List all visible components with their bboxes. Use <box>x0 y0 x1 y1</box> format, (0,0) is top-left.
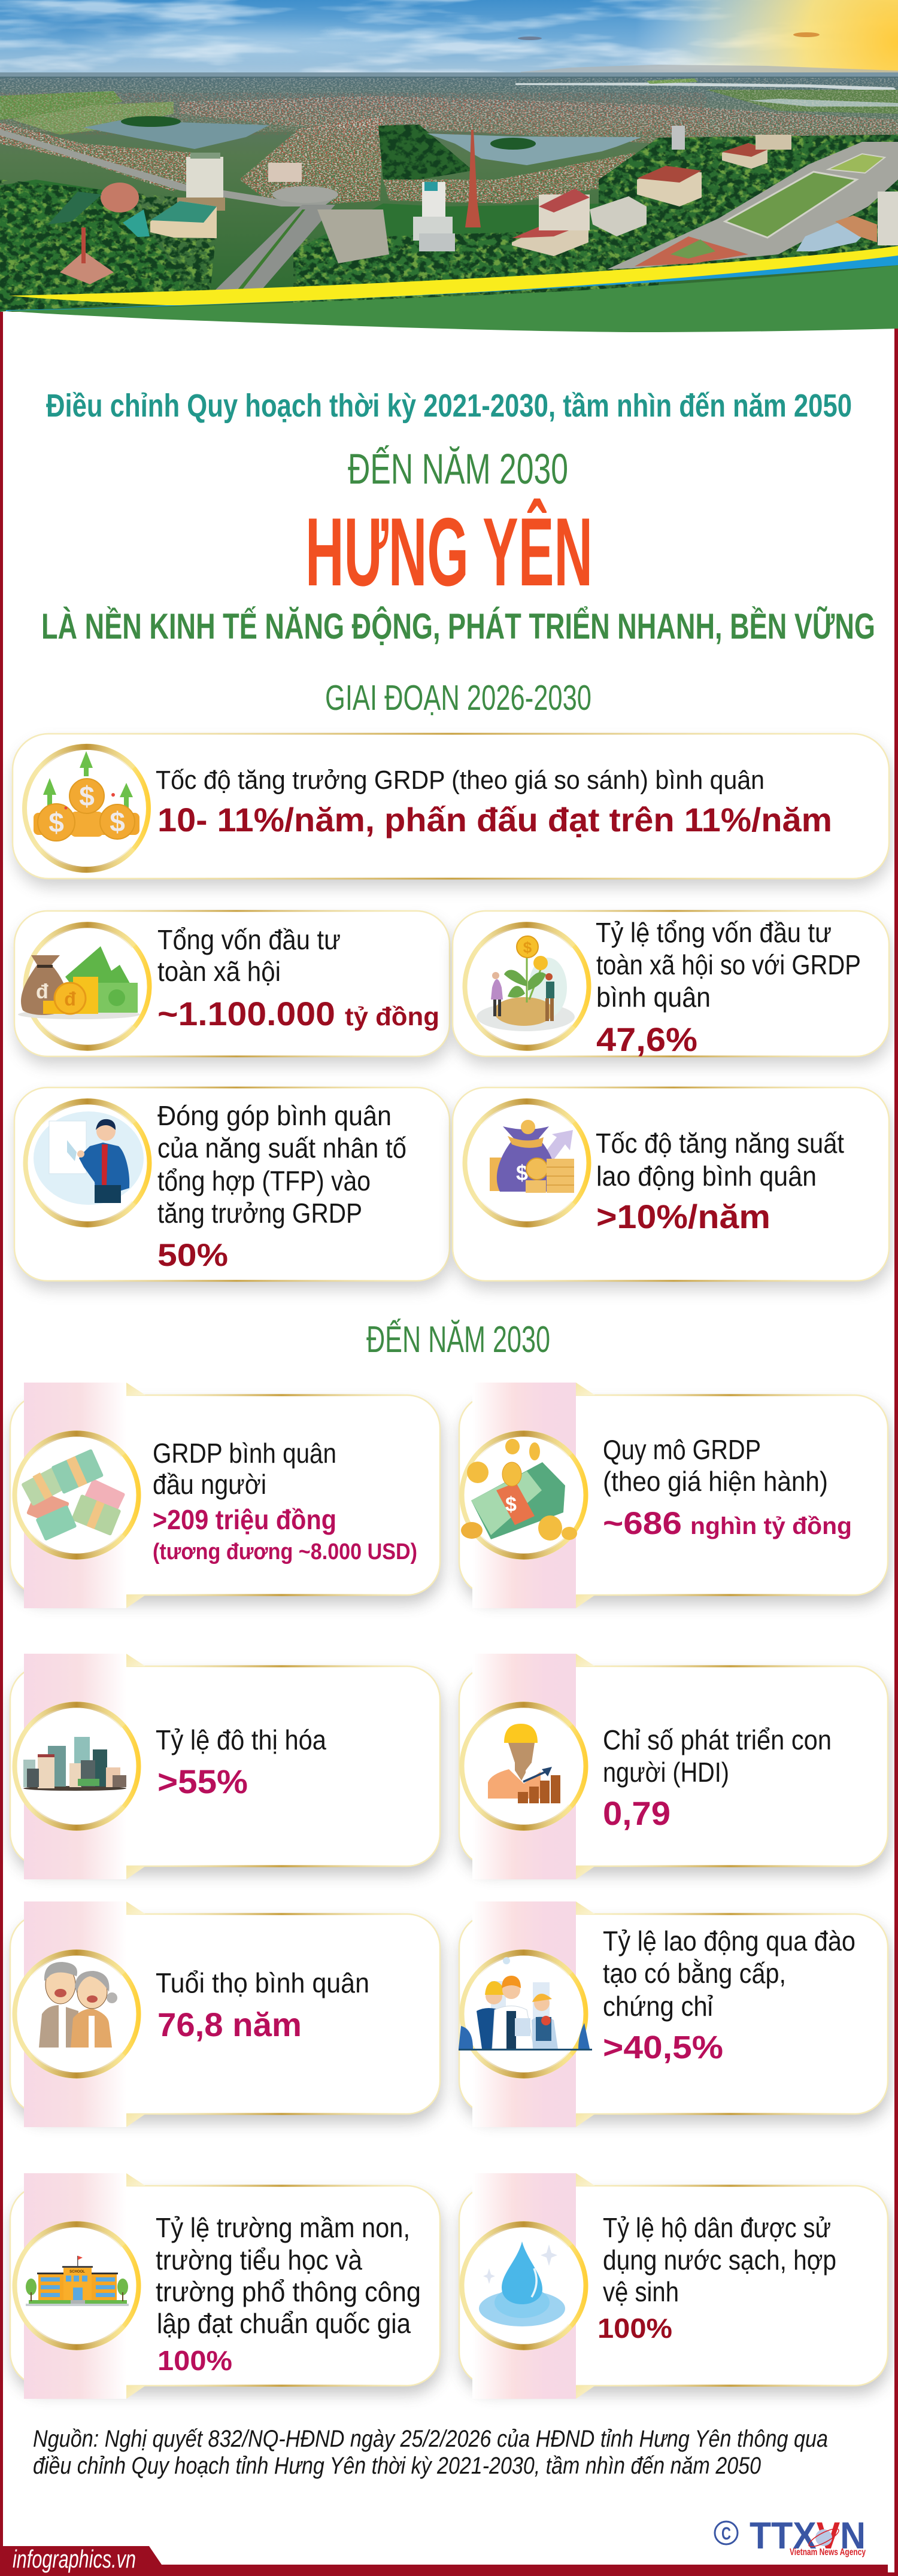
card: national-standard schools: trường phổ thông công <box>156 2276 421 2307</box>
text: life expectancy: Tuổi thọ bình quân <box>156 1967 369 1998</box>
card: trained labour share <box>459 1901 890 2127</box>
text: schools: Tỷ lệ trường mầm non, <box>156 2212 410 2243</box>
value: HDI: 0,79 <box>603 1794 671 1832</box>
icon: worker with rising bars <box>488 1724 560 1803</box>
text: total investment: Tổng vốn đầu tư <box>157 924 341 955</box>
card: national-standard schools <box>10 2173 442 2399</box>
source note <box>33 2426 828 2479</box>
value: GRDP scale: ~686 <box>603 1506 682 1541</box>
panel: investment to GRDP ratio <box>453 911 891 1065</box>
value: GRDP per capita: >209 triệu đồng <box>153 1504 336 1535</box>
panel: investment to GRDP ratio: bình quân <box>596 982 711 1013</box>
card: national-standard schools: trường tiểu học và <box>156 2244 362 2276</box>
panel: TFP contribution: tổng hợp (TFP) vào <box>157 1165 371 1196</box>
icon: water drop <box>479 2241 565 2326</box>
icon: rising gold coins: $ <box>79 780 95 812</box>
source note: điều chỉnh Quy hoạch tỉnh Hưng Yên thời kỳ 2021-2030, tầm nhìn đến năm 2050 <box>33 2453 761 2479</box>
card: human development index: người (HDI) <box>603 1757 729 1788</box>
icon: stacks of banknotes <box>21 1449 125 1541</box>
value: trained labour: >40,5% <box>603 2030 723 2065</box>
icon: rising gold coins <box>34 751 139 841</box>
footer bar with site name: infographics.vn <box>13 2545 136 2573</box>
section heading: by 2030: ĐẾN NĂM 2030 <box>366 1319 550 1360</box>
card: trained labour share: tạo có bằng cấp, <box>603 1958 786 1989</box>
card: clean water access: dụng nước sạch, hợp <box>603 2244 836 2276</box>
icon: three workers <box>459 1957 592 2051</box>
text: clean water: Tỷ lệ hộ dân được sử <box>603 2212 831 2243</box>
text: GRDP growth: Tốc độ tăng trưởng GRDP (theo giá so sánh) bình quân <box>156 765 764 795</box>
icon: purple money bag with arrow <box>490 1120 574 1193</box>
icon: money bag and banknotes: đ <box>36 980 48 1003</box>
text: TFP contribution: Đóng góp bình quân <box>157 1100 392 1131</box>
value: investment ratio: 47,6% <box>596 1020 697 1058</box>
icon: cash and coins: $ <box>505 1493 517 1516</box>
icon: elderly couple <box>39 1962 117 2048</box>
text: investment ratio: Tỷ lệ tổng vốn đầu tư <box>596 917 832 948</box>
panel: total social investment: toàn xã hội <box>157 956 281 987</box>
text: GRDP per capita: GRDP bình quân <box>153 1438 336 1469</box>
icon: plant growing coins: $ <box>523 938 532 956</box>
hero wave: yellow, blue and green ribbons <box>0 246 898 335</box>
card: GRDP per capita: đầu người <box>153 1469 266 1500</box>
logo: TTXVN Vietnam News Agency: Vietnam News Agency <box>790 2547 866 2557</box>
panel: TFP contribution: của năng suất nhân tố <box>157 1132 406 1164</box>
icon: money bag and banknotes: đ <box>64 988 76 1010</box>
footer bar with site name <box>0 2545 898 2576</box>
logo: TTXVN Vietnam News Agency: C <box>721 2524 731 2544</box>
panel: labour productivity growth: lao động bình quân <box>596 1161 817 1192</box>
value: life expectancy: 76,8 năm <box>157 2006 302 2043</box>
card: GRDP scale: nghìn tỷ đồng <box>690 1513 852 1539</box>
card: GRDP scale <box>459 1383 890 1608</box>
text: labour productivity: Tốc độ tăng năng suất <box>596 1128 844 1159</box>
text: HDI: Chỉ số phát triển con <box>603 1724 832 1755</box>
text: urbanisation: Tỷ lệ đô thị hóa <box>156 1724 326 1755</box>
tall buildings <box>186 157 223 199</box>
panel: total social investment: tỷ đồng <box>345 1003 439 1031</box>
icon: school building <box>26 2256 129 2306</box>
text: GRDP scale: Quy mô GRDP <box>603 1434 761 1465</box>
value: urbanisation: >55% <box>157 1763 248 1800</box>
icon: rising gold coins: $ <box>110 806 125 837</box>
value: GRDP growth: 10- 11%/năm, phấn đấu đạt trên 11%/năm <box>157 801 832 839</box>
section heading: 2026-2030: GIAI ĐOẠN 2026-2030 <box>325 678 591 718</box>
text: trained labour: Tỷ lệ lao động qua đào <box>603 1925 855 1957</box>
value: labour productivity: >10%/năm <box>596 1198 770 1235</box>
card: GRDP per capita: (tương đương ~8.000 USD) <box>153 1539 417 1565</box>
panel: TFP contribution <box>14 1087 451 1289</box>
hero photo: aerial view of Hung Yen city <box>0 0 898 312</box>
icon: plant growing coins <box>477 936 575 1031</box>
panel: GRDP growth rate <box>13 734 891 887</box>
panel: labour productivity growth <box>453 1087 891 1289</box>
card: life expectancy <box>10 1901 442 2127</box>
panel: investment to GRDP ratio: toàn xã hội so với GRDP <box>596 949 861 980</box>
icon: purple money bag with arrow: $ <box>516 1161 528 1185</box>
main title: HƯNG YÊN <box>305 498 593 606</box>
card: human development index <box>459 1654 890 1879</box>
panel: total social investment <box>14 911 451 1065</box>
icon: rising gold coins: $ <box>48 807 64 838</box>
logo: TTXVN Vietnam News Agency: TTXVN <box>750 2515 866 2557</box>
icon: businessman presenting <box>34 1111 144 1205</box>
icon: money bag and banknotes <box>18 946 140 1019</box>
card: trained labour share: chứng chỉ <box>603 1991 713 2022</box>
icon: cash and coins <box>461 1439 577 1541</box>
card: GRDP scale: (theo giá hiện hành) <box>603 1466 828 1497</box>
card: clean water access: vệ sinh <box>603 2276 679 2307</box>
value: TFP contribution: 50% <box>157 1238 228 1273</box>
icon: school building: SCHOOL <box>69 2270 85 2274</box>
heading: by 2030: ĐẾN NĂM 2030 <box>348 446 568 493</box>
panel: TFP contribution: tăng trưởng GRDP <box>157 1198 362 1229</box>
value: schools: 100% <box>157 2345 232 2376</box>
value: total investment: ~1.100.000 <box>157 995 335 1032</box>
card: clean water access <box>459 2173 890 2399</box>
card: GRDP per capita <box>10 1383 442 1608</box>
card: urbanisation rate <box>10 1654 442 1879</box>
value: clean water: 100% <box>597 2313 672 2344</box>
card: national-standard schools: lập đạt chuẩn quốc gia <box>157 2308 411 2339</box>
icon: city buildings <box>23 1737 126 1791</box>
